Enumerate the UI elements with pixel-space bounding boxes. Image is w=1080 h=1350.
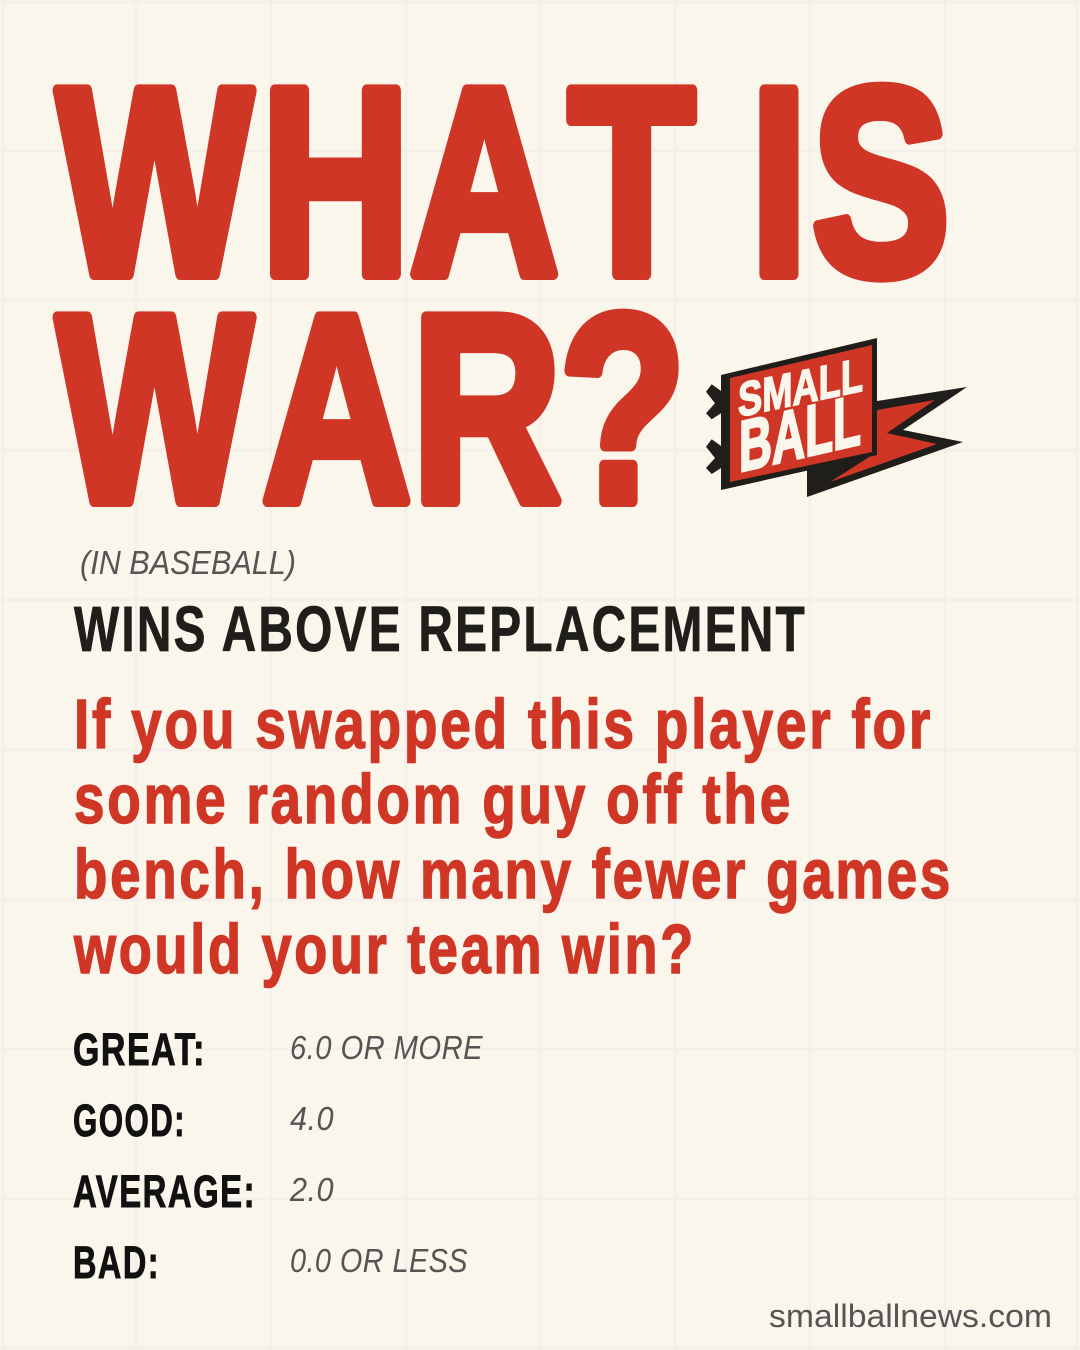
rating: great: 6.0 OR MORE [290, 1029, 483, 1066]
title line: WAR?: WAR? [57, 260, 686, 558]
pennant tail [807, 387, 967, 497]
rating: bad: 0.0 OR LESS [290, 1242, 468, 1279]
rating: great [73, 1024, 483, 1075]
definition line 2: some random guy off the [74, 760, 793, 838]
title line: WHAT IS: WHAT IS [57, 33, 950, 331]
logo text: SMALL: SMALL [738, 348, 863, 428]
definition line 4: would your team win? [73, 910, 696, 988]
rating: average: 2.0 [289, 1171, 334, 1208]
rating: average: AVERAGE: [73, 1166, 256, 1217]
pennant body [721, 338, 877, 490]
rating: good [73, 1095, 334, 1146]
rating: bad: BAD: [73, 1237, 160, 1288]
footer: website: smallballnews.com [769, 1298, 1052, 1334]
logo: Small Ball pennant [706, 338, 967, 497]
pennant stitching bottom [706, 439, 721, 474]
rating: good: 4.0 [290, 1100, 334, 1137]
logo text: BALL: BALL [739, 380, 861, 488]
ratings scale [73, 1024, 483, 1288]
qualifier: in baseball: (IN BASEBALL) [80, 544, 296, 581]
pennant red panel [730, 345, 872, 482]
definition text [73, 685, 953, 988]
subtitle: wins above replacement: WINS ABOVE REPLACEMENT [74, 593, 807, 665]
rating: bad [73, 1237, 468, 1288]
rating: good: GOOD: [73, 1095, 186, 1146]
rating: great: GREAT: [73, 1024, 206, 1075]
pennant tail red fill [830, 400, 937, 482]
title [57, 33, 950, 558]
pennant stitching top [706, 384, 721, 419]
